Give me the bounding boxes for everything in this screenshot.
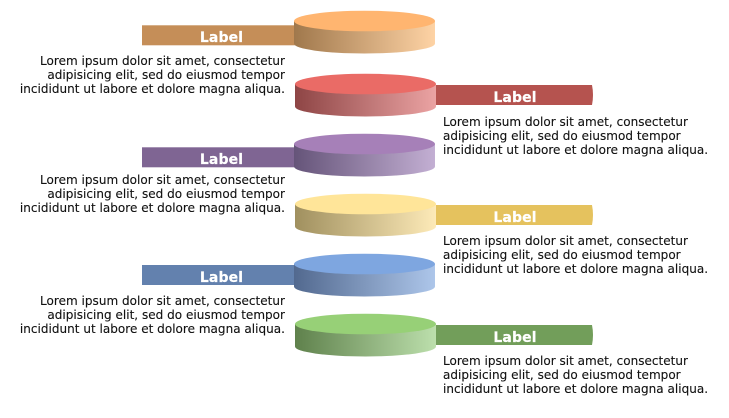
label bar 2: Label — [493, 90, 537, 106]
description 6: incididunt ut labore et dolore magna aliqua. — [443, 382, 708, 396]
description 2: Lorem ipsum dolor sit amet, consectetur — [443, 115, 688, 129]
item 4: yellow — [295, 194, 708, 276]
description 2: adipisicing elit, sed do eiusmod tempor — [443, 129, 681, 143]
description 1: Lorem ipsum dolor sit amet, consectetur — [40, 54, 285, 68]
item 6: green — [295, 314, 708, 396]
label bar 6: Label — [493, 330, 537, 346]
label bar 3 — [142, 147, 296, 168]
label bar 2 — [434, 85, 593, 106]
description 1: incididunt ut labore et dolore magna aliqua. — [20, 82, 285, 96]
label bar 4 — [434, 205, 593, 226]
label bar 1: Label — [200, 30, 243, 46]
description 3: Lorem ipsum dolor sit amet, consectetur — [40, 173, 285, 187]
description 6: adipisicing elit, sed do eiusmod tempor — [443, 368, 681, 382]
item 2: red — [295, 74, 708, 157]
description 3: incididunt ut labore et dolore magna aliqua. — [20, 201, 285, 215]
description 5: Lorem ipsum dolor sit amet, consectetur — [40, 294, 285, 308]
label bar 5 — [142, 265, 296, 286]
description 4: adipisicing elit, sed do eiusmod tempor — [443, 248, 681, 262]
description 6: Lorem ipsum dolor sit amet, consectetur — [443, 354, 688, 368]
label bar 6 — [434, 325, 593, 346]
disc 3 — [294, 134, 435, 176]
disc 2 — [295, 74, 436, 116]
disc 4 — [295, 194, 436, 236]
disc 6 — [295, 314, 436, 356]
label bar 1 — [142, 25, 296, 46]
description 5: adipisicing elit, sed do eiusmod tempor — [47, 308, 285, 322]
description 2: incididunt ut labore et dolore magna aliqua. — [443, 143, 708, 157]
label bar 3: Label — [200, 152, 243, 168]
item 3: purple — [20, 134, 435, 215]
disc 1 — [294, 11, 435, 53]
description 3: adipisicing elit, sed do eiusmod tempor — [47, 187, 285, 201]
disc 5 — [294, 254, 435, 296]
description 1: adipisicing elit, sed do eiusmod tempor — [47, 68, 285, 82]
item 5: blue — [20, 254, 435, 336]
description 5: incididunt ut labore et dolore magna aliqua. — [20, 322, 285, 336]
label bar 4: Label — [493, 210, 537, 226]
item 1: orange — [20, 11, 435, 96]
description 4: Lorem ipsum dolor sit amet, consectetur — [443, 234, 688, 248]
description 4: incididunt ut labore et dolore magna aliqua. — [443, 262, 708, 276]
label bar 5: Label — [200, 270, 243, 286]
